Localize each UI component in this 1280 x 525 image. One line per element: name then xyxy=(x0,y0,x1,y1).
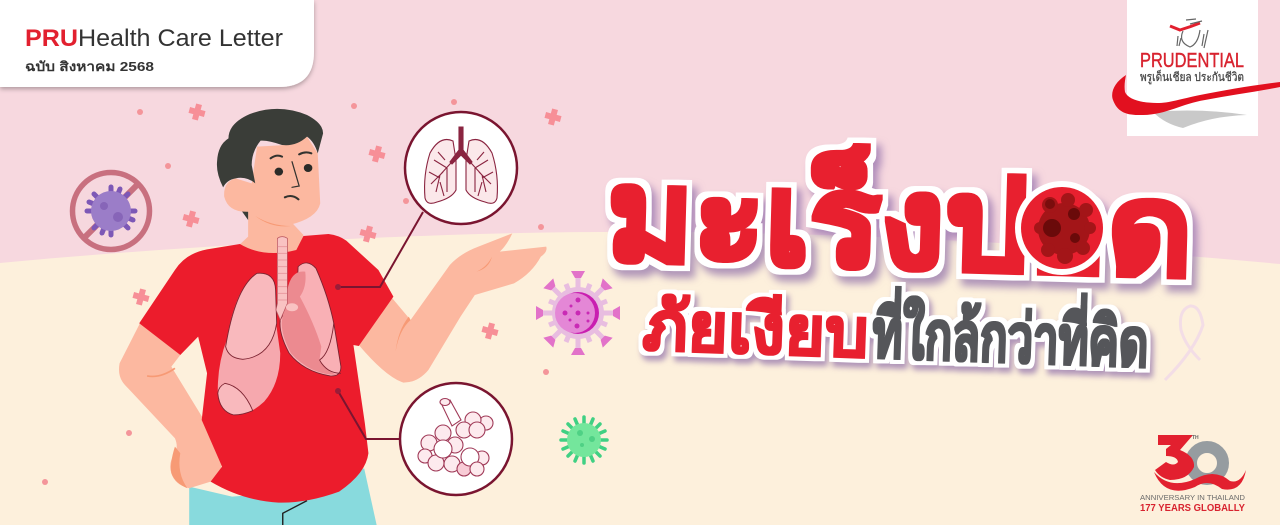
face xyxy=(224,137,320,225)
numeral 0 xyxy=(1191,447,1223,479)
person illustration xyxy=(119,109,547,525)
icon: alveoli cluster xyxy=(418,398,493,476)
callout: alveoli xyxy=(400,383,512,495)
icon: pink virus xyxy=(536,271,620,355)
anniversary line: ANNIVERSARY IN THAILAND xyxy=(1140,493,1246,502)
icon: awareness ribbon xyxy=(1165,306,1203,380)
hair xyxy=(217,109,323,187)
callout lines xyxy=(335,212,423,439)
decorative plus signs xyxy=(131,102,563,341)
logo: 30th anniversary xyxy=(1140,435,1246,514)
icon: green virus xyxy=(561,417,607,463)
numeral 3 xyxy=(1155,435,1194,480)
years line: 177 YEARS GLOBALLY xyxy=(1140,503,1245,514)
right arm xyxy=(359,233,547,383)
trachea xyxy=(276,237,298,320)
subtitle grey part: ที่ใกล้กว่าที่คิด xyxy=(871,285,1150,382)
TH: TH xyxy=(1192,435,1199,441)
subtitle xyxy=(641,277,1150,382)
eyebrows, eyes, nose, mouth xyxy=(271,152,311,199)
logo wordmark: PRUDENTIAL xyxy=(1140,50,1244,72)
logo shadow xyxy=(1153,111,1247,128)
logo ribbon xyxy=(1112,75,1280,115)
ribbon xyxy=(1154,470,1246,491)
main title: มะเร็งปอด xyxy=(605,137,1195,303)
logo figure xyxy=(1170,19,1208,48)
left arm xyxy=(119,323,222,488)
subtitle red part: ภัยเงียบ xyxy=(641,288,870,372)
icon: tumour in title xyxy=(1015,181,1109,275)
left lung xyxy=(218,273,280,415)
shirt xyxy=(139,234,393,503)
pants xyxy=(189,468,377,525)
header card xyxy=(0,0,314,87)
neck xyxy=(239,207,303,254)
header date: ฉบับ สิงหาคม 2568 xyxy=(25,59,154,74)
right lung xyxy=(280,263,341,376)
logo: Prudential xyxy=(1112,0,1280,136)
callout: lungs xyxy=(405,112,517,224)
icon: lungs xyxy=(425,127,497,203)
icon: blocked purple virus xyxy=(72,172,150,250)
header title: PRUHealth Care Letter xyxy=(25,25,283,52)
decorative dots xyxy=(42,99,549,485)
logo thai name: พรูเด็นเชียล ประกันชีวิต xyxy=(1140,69,1244,85)
